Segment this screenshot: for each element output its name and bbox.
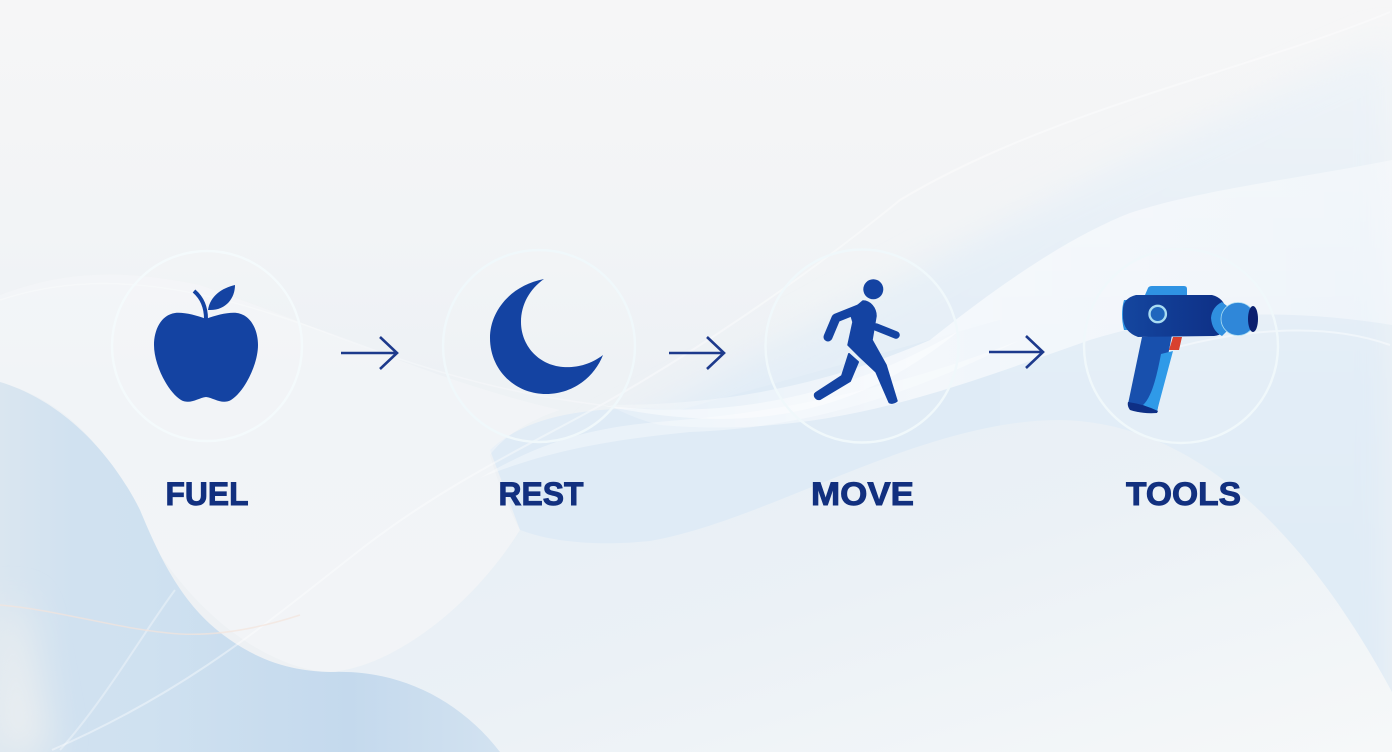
step: move bbox=[766, 250, 958, 512]
step: fuel bbox=[112, 251, 302, 512]
circle: fuel bbox=[112, 251, 302, 441]
arrow: move to tools bbox=[989, 336, 1043, 368]
step: rest bbox=[443, 250, 635, 512]
circle: rest bbox=[443, 250, 635, 442]
label: fuel: FUEL bbox=[166, 476, 248, 512]
circle: tools bbox=[1084, 249, 1278, 443]
icon: runner bbox=[815, 279, 897, 403]
step: tools bbox=[1084, 249, 1278, 512]
icon: apple bbox=[154, 285, 258, 402]
icon: moon bbox=[490, 279, 603, 394]
label: move: MOVE bbox=[811, 476, 914, 512]
arrow: rest to move bbox=[669, 337, 724, 369]
label: tools: TOOLS bbox=[1126, 476, 1241, 512]
circle: move bbox=[766, 250, 958, 442]
icon: massage gun bbox=[1122, 286, 1258, 413]
label: rest: REST bbox=[498, 476, 584, 512]
arrow: fuel to rest bbox=[341, 337, 397, 369]
